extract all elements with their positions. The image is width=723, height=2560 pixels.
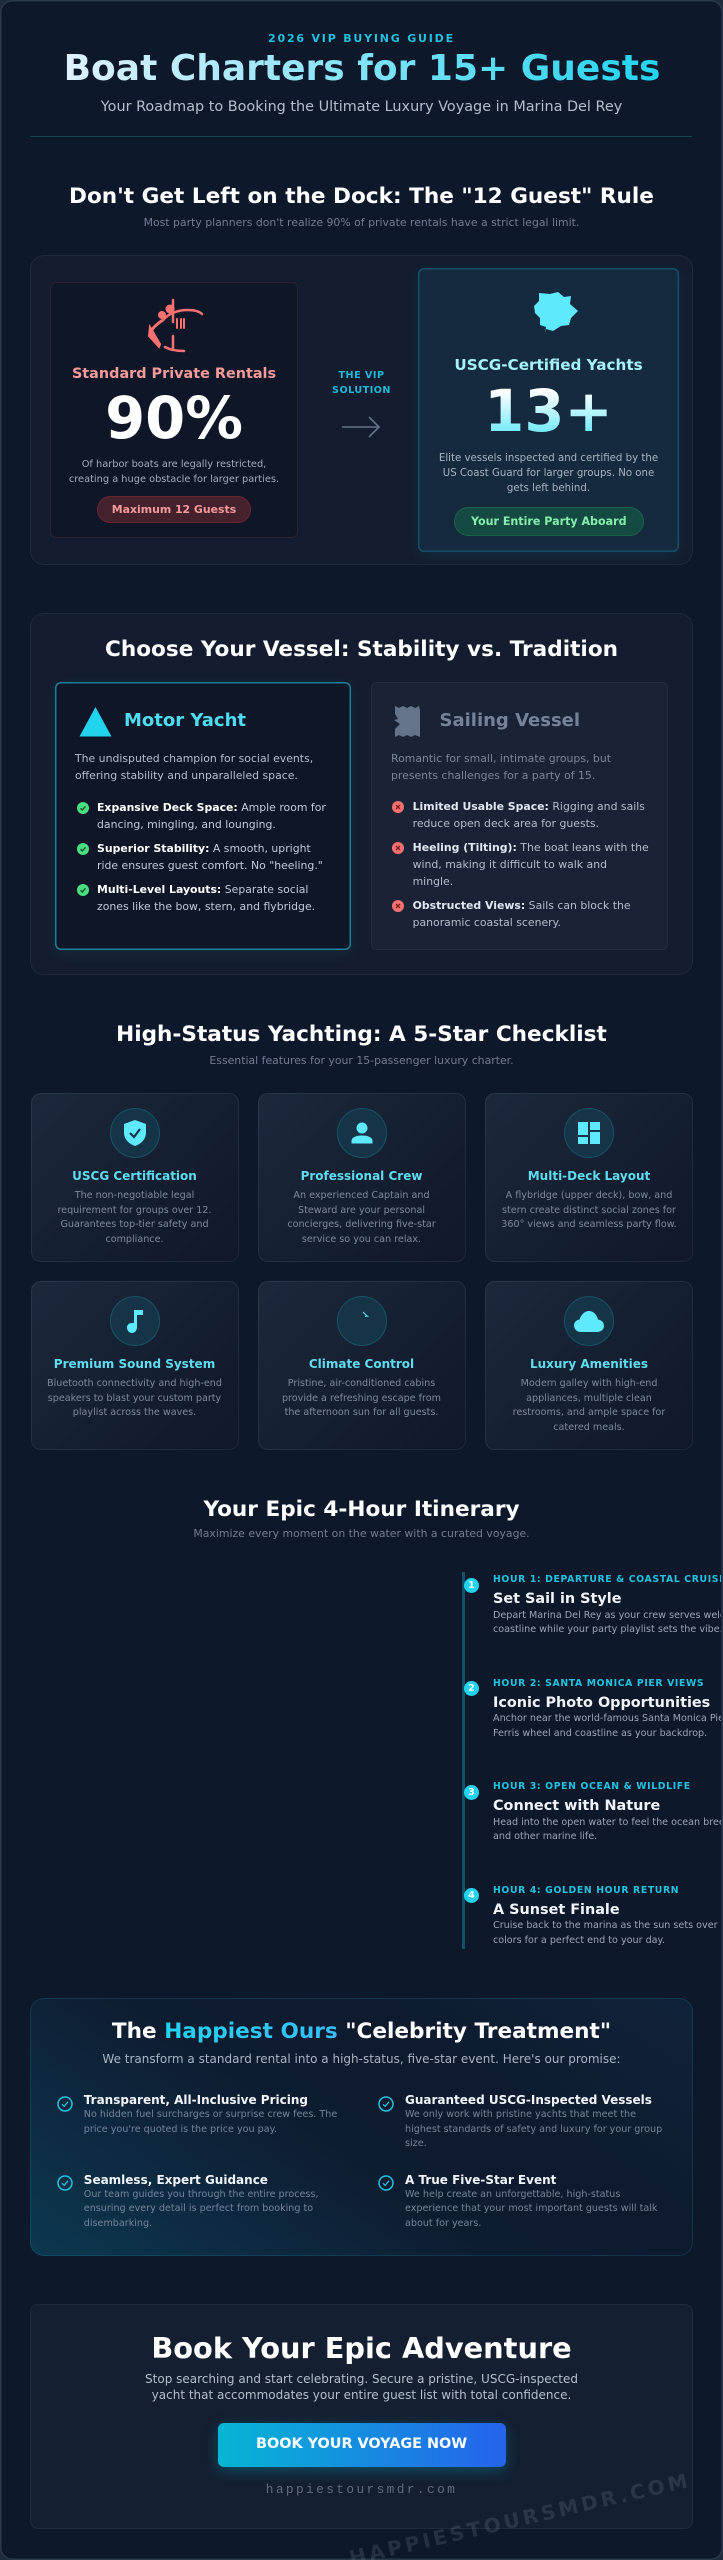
title: Sailing Vessel [440,710,580,731]
text: about for years. [405,2218,481,2229]
description: compliance. [105,1234,164,1244]
heading: itinerary: Your Epic 4-Hour Itinerary [203,1497,520,1522]
icon: certified badge [534,292,578,332]
x icon 3 [392,900,404,912]
benefit 1 [97,800,326,830]
label: the vip solution: THE VIP [338,370,384,381]
description [439,453,658,494]
check icon 1 [77,802,89,814]
step text [493,1920,721,1946]
step title: Set Sail in Style [493,1591,621,1607]
card: uscg-certified yachts [418,268,679,552]
icon: music note [110,1296,160,1346]
description [513,1378,666,1432]
marker 4: 4 [468,1890,475,1901]
title: Guaranteed USCG-Inspected Vessels [405,2093,652,2107]
marker 3: 3 [468,1786,475,1798]
description: the afternoon sun for all guests. [285,1407,438,1418]
card: standard private rentals [50,282,298,538]
description: The non-negotiable legal [75,1190,194,1201]
intro: We transform a standard rental into a high-status, five-star event. Here's our promise: [102,2052,621,2066]
title: A True Five-Star Event [405,2173,556,2187]
drawback 3: Obstructed Views: Sails can block the [413,898,631,912]
description: 360° views and seamless party flow. [501,1219,677,1230]
marker 2: 2 [468,1682,475,1694]
description: appliances, multiple clean [526,1392,652,1404]
text: No hidden fuel surcharges or surprise crew fees. The [84,2109,337,2120]
marker 4 [464,1888,479,1903]
panel: 12 guest comparison [30,255,693,565]
subheading: itinerary: Maximize every moment on the water with a curated voyage. [193,1527,530,1540]
description: An experienced Captain and [293,1190,430,1201]
description: catered meals. [553,1422,625,1432]
promise: guidance [56,2172,366,2234]
icon: check circle [56,2096,72,2112]
step text: colors for a perfect end to your day. [493,1935,665,1946]
text: We only work with pristine yachts that meet the [405,2109,636,2120]
check icon 2 [77,843,89,855]
description [282,1378,441,1418]
description: Guarantees top-tier safety and [60,1219,209,1230]
text: Our team guides you through the entire process, [84,2189,318,2200]
x icon 2 [392,842,404,854]
text [405,2188,657,2231]
description: concierges, delivering five-star [287,1219,436,1230]
marker 3 [464,1784,479,1800]
text: highest standards of safety and luxury for your group [405,2124,662,2135]
subheading: 12 guest rule: Most party planners don't realize 90% of private rentals have a strict legal limit. [144,216,579,229]
step 2 [464,1678,721,1739]
card: uscg certification [30,1093,238,1262]
badge: your entire party aboard [454,507,644,536]
description: speakers to blast your custom party [48,1392,221,1404]
heading: Choose Your Vessel: Stability vs. Tradition [105,637,618,662]
description: Romantic for small, intimate groups, but [391,752,611,764]
description: provide a refreshing escape from [282,1392,441,1404]
description [287,1190,436,1244]
heading: 12 guest rule: Don't Get Left on the Dock: The "12 Guest" Rule [69,184,654,209]
step text: and other marine life. [493,1831,597,1842]
description: requirement for groups over 12. [57,1204,212,1216]
description [47,1378,222,1418]
step text [493,1713,721,1739]
step 1 [464,1574,721,1635]
badge: your entire party aboard: Your Entire Party Aboard [471,515,627,528]
text: ensuring every detail is perfect from booking to [84,2203,313,2214]
icon: check circle [378,2096,394,2112]
text [84,2188,318,2231]
title: Seamless, Expert Guidance [84,2173,268,2187]
arrow [342,416,380,438]
step text: coastline while your party playlist sets the vibe. [493,1624,721,1635]
drawback 1: Limited Usable Space: Rigging and sails [413,800,645,812]
icon: shield [110,1108,160,1158]
step 4 [464,1884,721,1946]
text: disembarking. [84,2218,152,2229]
button [218,2423,506,2467]
button: BOOK YOUR VOYAGE NOW [256,2436,467,2452]
title: Multi-Deck Layout [528,1169,650,1183]
subtitle: Your Roadmap to Booking the Ultimate Luxury Voyage in Marina Del Rey [101,99,622,115]
description [391,752,611,782]
label: the vip solution [332,370,391,396]
step title: A Sunset Finale [493,1902,620,1918]
card: premium sound system [30,1281,238,1450]
description: The undisputed champion for social events, [75,752,313,765]
panel: choose your vessel [30,613,693,975]
timeline [462,1572,721,1949]
promise: uscg vessels [377,2092,687,2154]
description [501,1190,677,1230]
panel: call to action [30,2304,693,2529]
description: Steward are your personal [298,1204,425,1216]
website: happiestoursmdr.com [266,2482,457,2497]
drawback 2 [413,840,649,888]
benefit 3: zones like the bow, stern, and flybridge. [97,900,315,912]
drawback 2: Heeling (Tilting): The boat leans with the [413,840,649,854]
step title: Connect with Nature [493,1798,660,1814]
step title: Iconic Photo Opportunities [493,1694,710,1710]
title: Boat Charters for 15+ Guests [64,48,660,89]
description: Pristine, air-conditioned cabins [288,1378,435,1389]
benefit 2: Superior Stability: A smooth, upright [97,842,311,854]
heading: checklist: High-Status Yachting: A 5-Star Checklist [116,1022,607,1047]
promise: pricing [57,2093,337,2135]
step 3 [464,1781,721,1842]
icon: climate mark [336,1296,386,1346]
description: offering stability and unparalleled space. [75,769,298,782]
icon: person [336,1108,386,1158]
text: size. [405,2138,427,2149]
title: Luxury Amenities [530,1357,648,1371]
description: Bluetooth connectivity and high-end [47,1378,222,1389]
icon: broken anchor [148,298,204,352]
title: Motor Yacht [124,710,246,731]
benefit 3: Multi-Level Layouts: Separate social [97,882,308,896]
subheading: checklist: Essential features for your 15-passenger luxury charter. [209,1054,514,1067]
card: multi-deck layout [485,1093,693,1262]
text [405,2108,662,2152]
description: service so you can relax. [302,1234,421,1244]
x icon 1 [392,801,404,813]
benefit 2 [97,842,323,872]
icon: cloud [564,1296,614,1346]
text: We help create an unforgettable, high-status [405,2189,620,2200]
hour label: HOUR 1: DEPARTURE & COASTAL CRUISE [493,1574,721,1585]
benefit 1: dancing, mingling, and lounging. [97,818,276,830]
card title: Standard Private Rentals [72,366,276,382]
title: USCG Certification [72,1169,197,1183]
heading: The Happiest Ours "Celebrity Treatment" [112,2019,611,2044]
hour label: HOUR 2: SANTA MONICA PIER VIEWS [493,1678,704,1688]
drawback 2: wind, making it difficult to walk and [413,858,607,870]
description [74,752,313,782]
card: motor yacht [55,682,351,950]
card: professional crew [258,1093,466,1262]
icon: layout [564,1108,614,1158]
text [30,2371,693,2404]
check icon 3 [77,884,89,896]
icon: check circle [56,2175,72,2191]
text: experience that your most important guests will talk [405,2203,657,2214]
heading: Book Your Epic Adventure [151,2331,572,2365]
step text [493,1610,721,1635]
marker 1 [464,1578,479,1592]
icon: sailing vessel [394,706,420,737]
step text [493,1816,721,1842]
description: stern create distinct social zones for [502,1204,676,1216]
description: Modern galley with high-end [521,1378,657,1389]
text: price you're quoted is the price you pay. [84,2124,277,2135]
description: A flybridge (upper deck), bow, and [506,1190,672,1201]
hour label: HOUR 4: GOLDEN HOUR RETURN [493,1884,679,1896]
text: yacht that accommodates your entire guest list with total confidence. [152,2388,571,2402]
icon: check circle [378,2175,394,2191]
description: gets left behind. [507,483,590,494]
title: Professional Crew [301,1169,422,1183]
card: luxury amenities [485,1281,693,1450]
benefit 3 [97,882,315,912]
stat: 90%: 90% [105,385,243,452]
card: sailing vessel [371,682,668,950]
icon: motor yacht triangle [80,707,112,736]
eyebrow: 2026 VIP BUYING GUIDE [268,32,455,45]
drawback 1 [413,800,645,830]
badge: maximum 12 guests [97,496,251,523]
benefit 2: ride ensures guest comfort. No "heeling." [97,858,323,872]
panel: celebrity treatment [30,1998,693,2256]
description: US Coast Guard for larger groups. No one [443,468,654,479]
card: climate control [258,1281,466,1450]
label: the vip solution: SOLUTION [332,384,391,396]
drawback 3 [413,898,631,928]
title: Transparent, All-Inclusive Pricing [84,2093,308,2107]
step text: Ferris wheel and coastline as your backdrop. [493,1728,707,1739]
drawback 1: reduce open deck area for guests. [413,816,599,830]
header [64,32,660,115]
benefit 1: Expansive Deck Space: Ample room for [97,800,326,814]
text [84,2108,337,2137]
badge: maximum 12 guests: Maximum 12 Guests [112,503,236,516]
description: playlist across the waves. [73,1407,196,1418]
title: Premium Sound System [54,1357,215,1371]
title: Climate Control [309,1357,414,1371]
description [69,458,279,484]
description: restrooms, and ample space for [513,1407,665,1418]
card title: USCG-Certified Yachts [454,356,643,374]
description: Elite vessels inspected and certified by the [439,453,658,464]
drawback 3: panoramic coastal scenery. [413,916,561,928]
stat: 13+: 13+ [484,378,613,445]
description: Of harbor boats are legally restricted, [82,458,266,470]
promise: five-star event [377,2172,687,2234]
hour label: HOUR 3: OPEN OCEAN & WILDLIFE [493,1781,691,1792]
marker 1: 1 [468,1580,475,1590]
text: Stop searching and start celebrating. Secure a pristine, USCG-inspected [145,2372,578,2386]
description: presents challenges for a party of 15. [391,768,595,782]
marker 2 [464,1680,479,1696]
description [57,1190,212,1244]
drawback 2: mingle. [413,874,453,888]
description: creating a huge obstacle for larger parties. [69,474,279,484]
